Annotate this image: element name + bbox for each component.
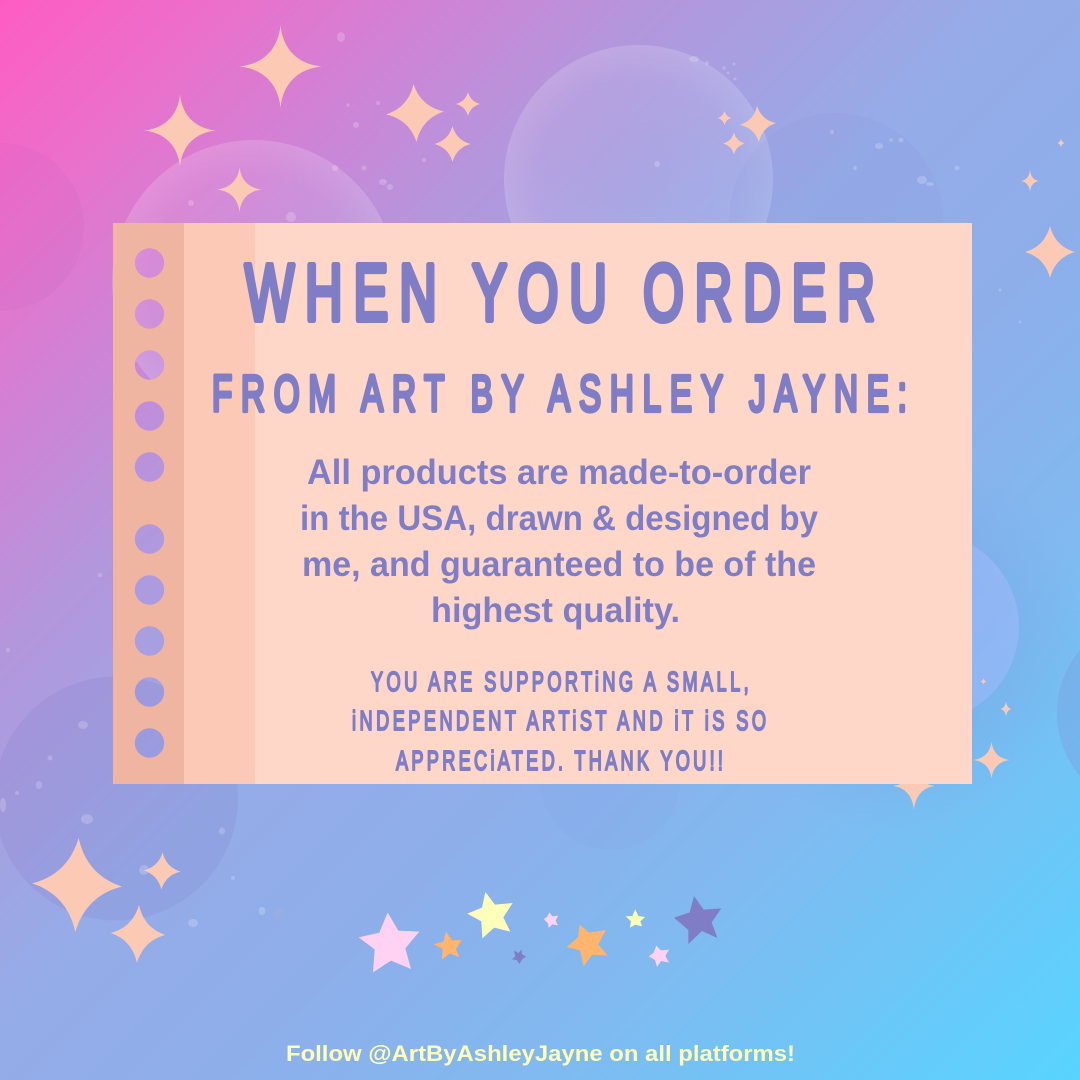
title: WHEN YOU ORDER [245, 249, 875, 338]
body paragraph: in the USA, drawn & designed by [300, 499, 818, 538]
footer handle: Follow @ArtByAshleyJayne on all platforms! [286, 1041, 795, 1066]
notebook panel [113, 223, 972, 784]
bottom-left sparkle cluster [30, 836, 181, 964]
paint speckles [0, 32, 1022, 927]
body paragraph [300, 453, 818, 630]
thank-you note: APPRECiATED. THANK YOU!! [396, 746, 723, 777]
top-right sparkle cluster [718, 105, 777, 154]
subtitle: FROM ART BY ASHLEY JAYNE: [212, 366, 907, 423]
right edge sparkles [973, 138, 1075, 778]
body paragraph: me, and guaranteed to be of the [302, 545, 816, 584]
thank-you note: iNDEPENDENT ARTiST AND iT iS SO [352, 706, 766, 737]
body paragraph: highest quality. [431, 591, 680, 630]
sparkle behind panel [893, 762, 935, 810]
thank-you note: YOU ARE SUPPORTiNG A SMALL, [371, 667, 749, 698]
top-left sparkle cluster [144, 26, 480, 212]
thank-you note [352, 667, 766, 777]
confetti stars [359, 892, 721, 972]
body paragraph: All products are made-to-order [307, 453, 811, 492]
